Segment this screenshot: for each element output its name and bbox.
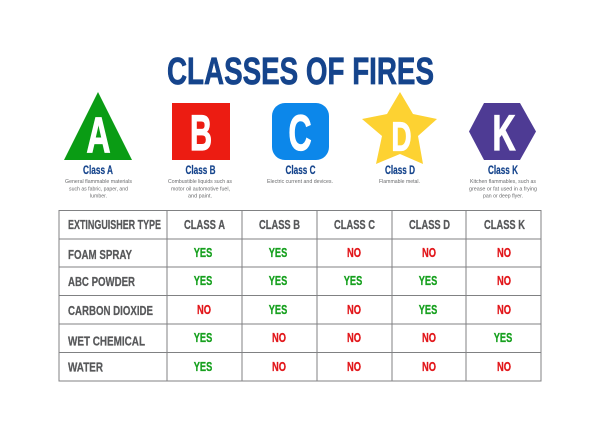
description: class A bbox=[65, 179, 132, 200]
table header row: CLASS C bbox=[334, 218, 375, 232]
table header row: CLASS K bbox=[484, 218, 525, 232]
table header row: CLASS D bbox=[409, 218, 450, 232]
row: water: NO bbox=[497, 359, 511, 374]
icon: green triangle A: A bbox=[86, 108, 110, 164]
row: wet chemical: NO bbox=[272, 330, 286, 345]
icon: yellow star D: D bbox=[392, 114, 412, 160]
row: wet chemical: YES bbox=[494, 330, 512, 345]
label: class K: Class K bbox=[488, 165, 518, 177]
table header row: EXTINGUISHER TYPE bbox=[68, 218, 161, 232]
row: foam spray bbox=[68, 245, 511, 262]
description: class K: grease or fat used in a frying bbox=[469, 186, 537, 192]
row: water bbox=[68, 359, 511, 374]
row: abc powder: YES bbox=[344, 273, 362, 288]
table grid bbox=[59, 210, 541, 381]
description: class C: Electric current and devices. bbox=[267, 179, 333, 185]
label: class A: Class A bbox=[83, 165, 113, 177]
row: wet chemical bbox=[68, 330, 512, 348]
row: wet chemical: YES bbox=[194, 330, 212, 345]
icon: blue rounded square C: C bbox=[288, 105, 312, 161]
row: carbon dioxide bbox=[68, 302, 511, 318]
panel: class C bbox=[267, 103, 333, 185]
title: CLASSES OF FIRES bbox=[167, 51, 434, 93]
row: foam spray: NO bbox=[422, 245, 436, 260]
description: class K: Kitchen flammables, such as bbox=[470, 179, 536, 185]
row: carbon dioxide: CARBON DIOXIDE bbox=[68, 304, 153, 318]
row: carbon dioxide: NO bbox=[497, 302, 511, 317]
description: class B bbox=[168, 179, 232, 200]
row: foam spray: YES bbox=[194, 245, 212, 260]
row: water: NO bbox=[347, 359, 361, 374]
description: class D: Flammable metal. bbox=[379, 179, 420, 185]
description: class B: motor oil automotive fuel, bbox=[171, 186, 230, 192]
panel: class A bbox=[64, 92, 132, 200]
row: wet chemical: WET CHEMICAL bbox=[68, 334, 145, 348]
row: foam spray: NO bbox=[347, 245, 361, 260]
table: extinguisher types by fire class bbox=[59, 210, 541, 381]
table header row: CLASS B bbox=[259, 218, 300, 232]
row: water: WATER bbox=[68, 360, 103, 374]
label: class D: Class D bbox=[385, 165, 415, 177]
icon: red square B: B bbox=[190, 105, 212, 161]
row: abc powder: NO bbox=[497, 273, 511, 288]
row: carbon dioxide: YES bbox=[419, 302, 437, 317]
description: class B: and paint. bbox=[188, 194, 212, 200]
description: class K: pan or deep flyer. bbox=[483, 194, 523, 200]
row: carbon dioxide: NO bbox=[347, 302, 361, 317]
panel: class D bbox=[362, 92, 437, 185]
panel: class B bbox=[168, 103, 232, 200]
description: class B: Combustible liquids such as bbox=[168, 179, 232, 185]
label: class B: Class B bbox=[186, 165, 216, 177]
description: class A: General flammable materials bbox=[65, 179, 132, 185]
row: abc powder: YES bbox=[419, 273, 437, 288]
row: abc powder bbox=[68, 273, 511, 289]
row: water: YES bbox=[194, 359, 212, 374]
row: wet chemical: NO bbox=[422, 330, 436, 345]
row: foam spray: FOAM SPRAY bbox=[68, 248, 133, 262]
icon: purple hexagon K: K bbox=[492, 105, 516, 161]
row: water: NO bbox=[422, 359, 436, 374]
row: wet chemical: NO bbox=[347, 330, 361, 345]
row: foam spray: NO bbox=[497, 245, 511, 260]
description: class K bbox=[469, 179, 537, 200]
row: abc powder: YES bbox=[194, 273, 212, 288]
row: foam spray: YES bbox=[269, 245, 287, 260]
label: class C: Class C bbox=[286, 165, 316, 177]
row: abc powder: YES bbox=[269, 273, 287, 288]
table header row bbox=[68, 218, 525, 232]
table header row: CLASS A bbox=[184, 218, 225, 232]
description: class A: lumber. bbox=[90, 194, 107, 200]
row: abc powder: ABC POWDER bbox=[68, 275, 135, 289]
description: class A: such as fabric, paper, and bbox=[69, 186, 128, 192]
row: carbon dioxide: NO bbox=[197, 302, 211, 317]
row: water: NO bbox=[272, 359, 286, 374]
row: carbon dioxide: YES bbox=[269, 302, 287, 317]
panel: class K bbox=[469, 103, 537, 200]
